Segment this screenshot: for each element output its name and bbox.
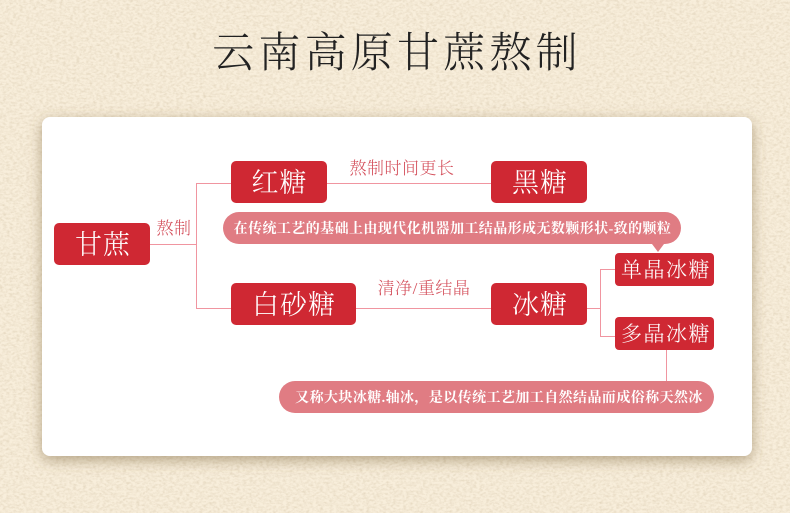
node: sugarcane <box>54 223 150 265</box>
node: red sugar: 红糖 <box>252 168 308 198</box>
connector: red sugar to black sugar <box>327 182 491 184</box>
connector: sugarcane to red and white sugar <box>150 184 231 308</box>
label: longer boiling time: 熬制时间更长 <box>350 159 454 178</box>
callout: granulated crystal note: 在传统工艺的基础上由现代化机器加工结晶形成无数颗形状-致的颗粒 <box>234 220 671 237</box>
title: 云南高原甘蔗熬制 <box>212 30 582 77</box>
node: rock sugar <box>491 283 587 325</box>
connector: rock sugar to crystal types <box>587 270 615 336</box>
node: polycrystal rock sugar <box>615 317 714 350</box>
node: white sugar <box>231 283 356 325</box>
node: monocrystal rock sugar: 单晶冰糖 <box>621 258 711 282</box>
callout: granulated crystal note <box>223 212 681 252</box>
node: black sugar: 黑糖 <box>512 168 568 198</box>
callout: natural rock sugar note: 又称大块冰糖.轴冰，是以传统工艺加工自然结晶而成俗称天然冰 <box>295 389 703 406</box>
node: monocrystal rock sugar <box>615 253 714 286</box>
node: red sugar <box>231 161 327 203</box>
connector: polycrystal to note <box>666 350 668 381</box>
node: black sugar <box>491 161 587 203</box>
node: polycrystal rock sugar: 多晶冰糖 <box>621 322 711 346</box>
node: rock sugar: 冰糖 <box>512 290 568 320</box>
node: sugarcane: 甘蔗 <box>75 230 131 260</box>
label: boiling: 熬制 <box>156 219 192 238</box>
node: white sugar: 白砂糖 <box>252 290 336 320</box>
connector: white sugar to rock sugar <box>356 308 491 310</box>
panel: sugar process flow <box>42 117 752 456</box>
callout: natural rock sugar note <box>279 381 714 413</box>
label: purify and recrystallize: 清净/重结晶 <box>378 279 470 298</box>
